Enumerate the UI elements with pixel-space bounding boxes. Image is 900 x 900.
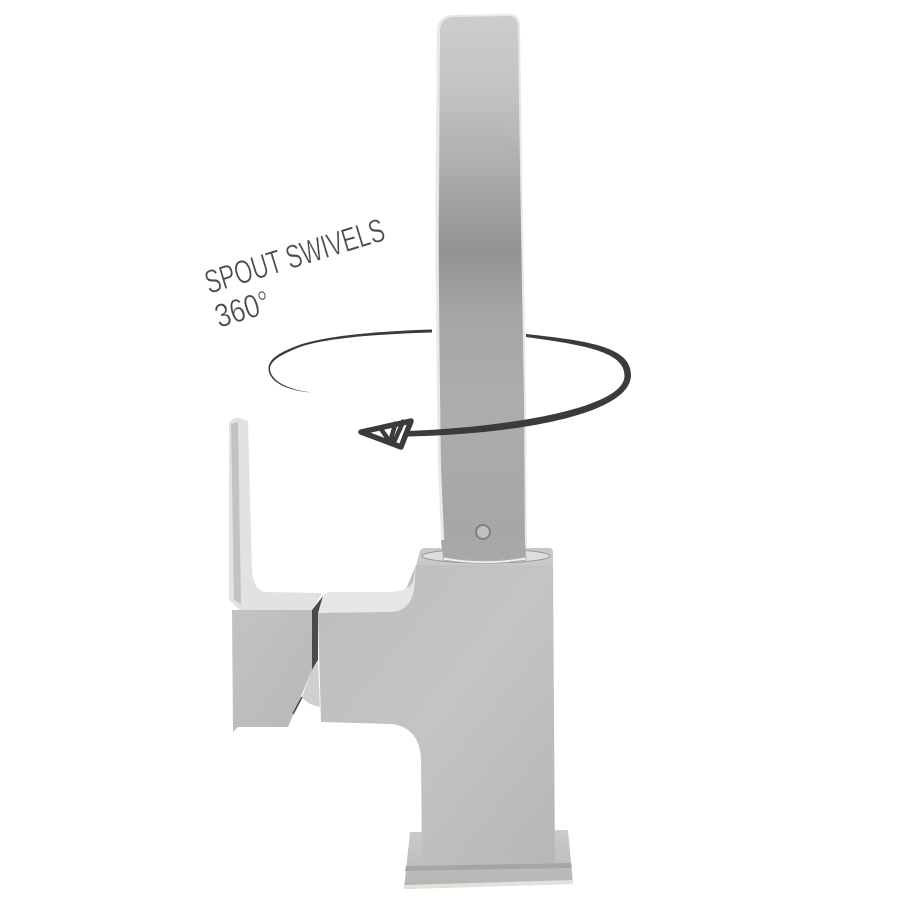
faucet body	[318, 565, 555, 863]
spout	[435, 14, 527, 560]
handle pivot gap	[293, 596, 323, 714]
arrow shaft	[408, 334, 631, 436]
arrow: 360 degree rotation	[268, 330, 631, 447]
handle lever	[229, 418, 322, 732]
label: spout swivels: SPOUT SWIVELS	[200, 211, 389, 301]
faucet	[229, 14, 573, 889]
swivel collar	[416, 540, 553, 566]
arrow tail	[268, 330, 432, 392]
arrowhead	[361, 420, 411, 447]
callout text	[200, 211, 389, 335]
label: 360 degrees: 360°	[210, 283, 275, 335]
spout set screw	[475, 524, 491, 540]
base plate	[404, 830, 573, 889]
